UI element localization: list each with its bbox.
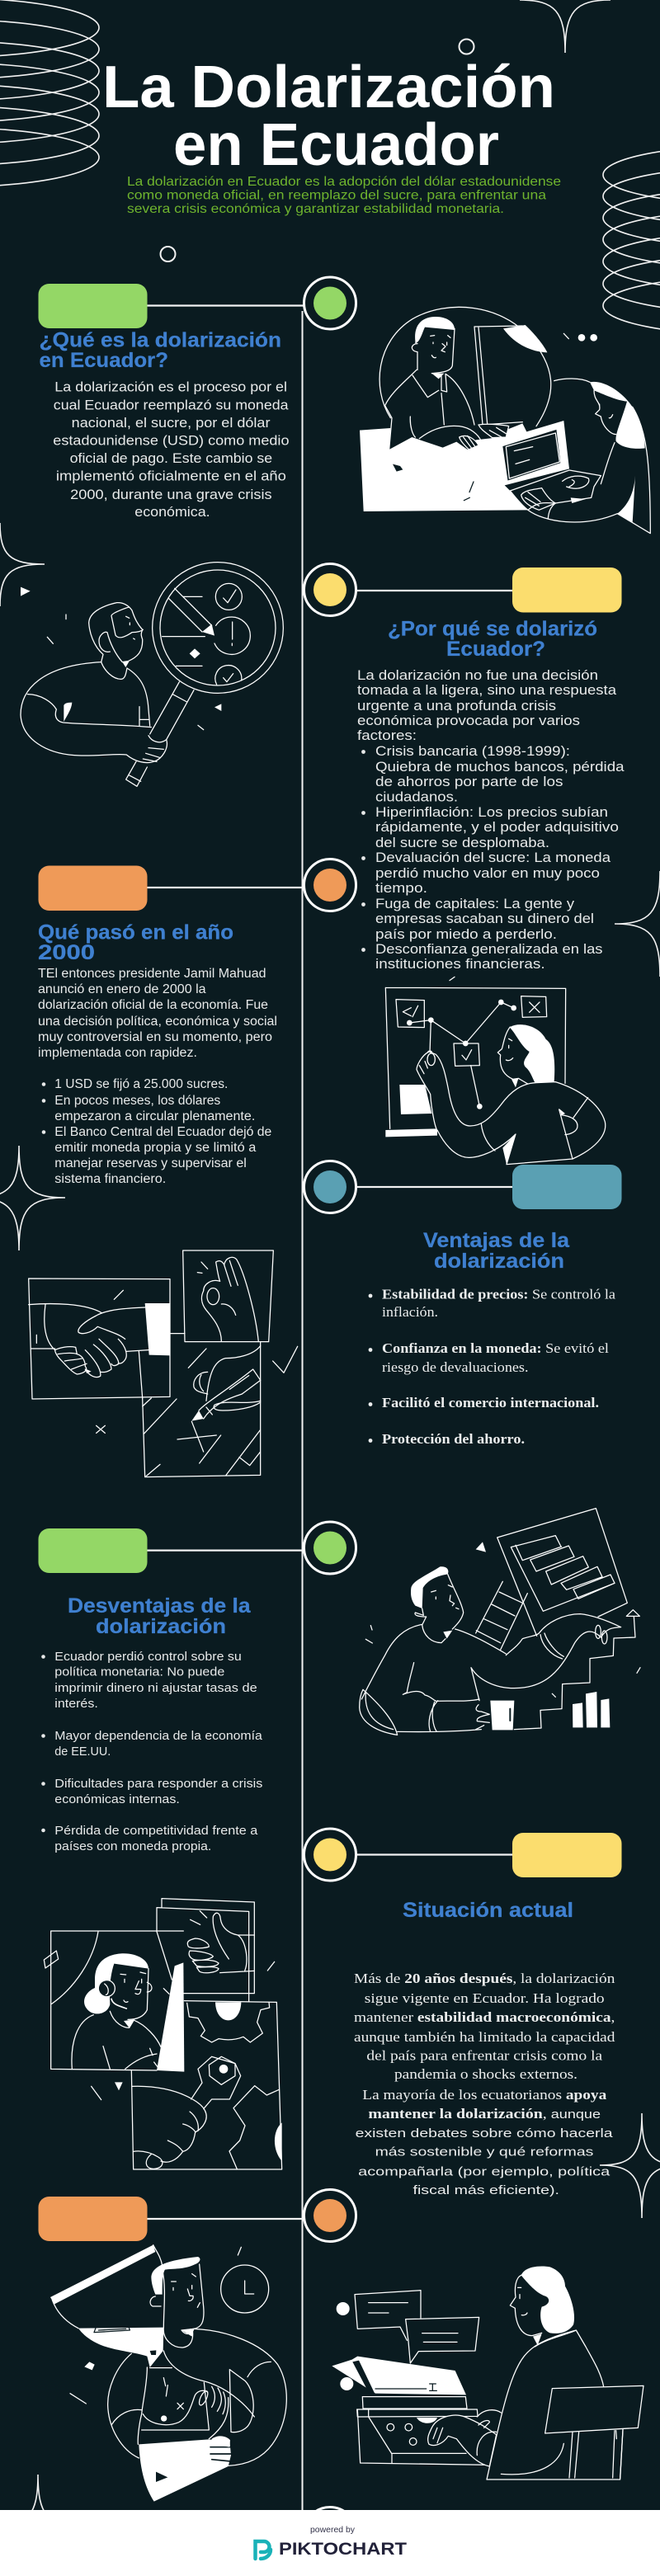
text block: situación: mantener estabilidad macroeconómica , (354, 2009, 615, 2025)
subtitle: severa crisis económica y garantizar estabilidad monetaria. (127, 202, 504, 216)
panel: ventajas (304, 1161, 640, 1735)
text block: situación: del país para enfrentar crisis como la (366, 2047, 603, 2064)
title: en Ecuador (173, 112, 499, 178)
illustration: woman at whiteboard (385, 977, 606, 1165)
connector and pill: teal (356, 1165, 622, 1209)
connector and pill: orange (38, 2197, 304, 2241)
text block: eventos: anunció en enero de 2000 la (38, 982, 206, 996)
text block: lista de desventajas: Dificultades para responder a crisis (54, 1777, 262, 1791)
text block: causas: Desconfianza generalizada en las (375, 942, 602, 957)
heading: año 2000: Qué pasó en el año (38, 921, 233, 944)
text block: eventos: dolarización oficial de la economía. Fue (38, 998, 268, 1012)
heading: qué es: ¿Qué es la dolarización (40, 328, 281, 351)
connector and pill: yellow (356, 567, 622, 612)
text block: eventos: emitir moneda propia y se limitó a (54, 1141, 257, 1155)
heading: qué es (40, 328, 281, 372)
heading: por qué (388, 617, 597, 661)
decoration: left stacked ellipses (0, 0, 99, 187)
subtitle: como moneda oficial, en reemplazo del sucre, para enfrentar una (127, 188, 546, 203)
text block: definición: nacional, el sucre, por el dólar (72, 415, 271, 431)
heading: desventajas: dolarización (96, 1615, 226, 1638)
illustration: handshake and signing frames (29, 1250, 298, 1477)
text block: causas: La dolarización no fue una decisión (357, 668, 598, 683)
panel: cierre (38, 2189, 644, 2502)
text block: definición: La dolarización es el proceso por el (54, 379, 287, 395)
text block: lista de desventajas: política monetaria: No puede (54, 1665, 224, 1679)
text block: situación: aunque también ha limitado la capacidad (354, 2029, 615, 2045)
text block: situación: La mayoría de los ecuatorianos apoya (362, 2087, 606, 2103)
text block: causas: tiempo. (375, 881, 427, 896)
decoration: right stacked ellipses (603, 145, 660, 335)
illustration: support agent, thumbs up and gears (44, 1899, 282, 2169)
heading: ventajas (423, 1229, 570, 1273)
text block: definición: implementó oficialmente en el año (56, 469, 286, 484)
text block: situación (354, 1971, 615, 2197)
node: green (304, 1522, 356, 1574)
text block: definición: cual Ecuador reemplazó su moneda (54, 397, 289, 412)
text block: eventos: En pocos meses, los dólares (54, 1094, 221, 1108)
illustration: woman at typewriter (332, 2267, 644, 2479)
subtitle (127, 175, 561, 216)
panel: desventajas (38, 1522, 356, 2169)
text block: causas (357, 668, 625, 972)
text block: definición: económica. (134, 504, 210, 520)
panel: qué es la dolarización (21, 277, 650, 786)
node: partial bottom circle (304, 2508, 356, 2559)
text block: lista de desventajas: interés. (54, 1697, 98, 1711)
text block: lista de desventajas: Mayor dependencia de la economía (54, 1729, 262, 1743)
text block: causas: del sucre se desplomaba. (375, 836, 549, 850)
text block: lista de desventajas (41, 1650, 262, 1853)
text block: eventos: implementada con rapidez. (38, 1046, 197, 1060)
text block: causas: urgente a una profunda crisis (357, 699, 556, 713)
decoration: small circles (160, 40, 474, 261)
text block: definición: oficial de pago. Este cambio se (70, 450, 272, 466)
text block: causas: rápidamente, y el poder adquisitivo (375, 820, 619, 835)
text block: lista de ventajas: Protección del ahorro. (382, 1431, 525, 1447)
footer (0, 2510, 660, 2576)
title (102, 54, 555, 178)
text block: causas: Quiebra de muchos bancos, pérdida (375, 760, 625, 775)
text block: lista de ventajas: Facilitó el comercio internacional. (382, 1395, 599, 1410)
heading: ventajas: dolarización (434, 1250, 564, 1273)
text block: eventos: manejar reservas y supervisar el (54, 1156, 247, 1170)
text block: lista de ventajas: Confianza en la moneda: Se evitó el (382, 1340, 609, 1356)
text block: situación: fiscal más eficiente). (412, 2183, 559, 2197)
text block: situación: Más de 20 años después , la dolarización (354, 1971, 615, 1986)
text block: situación: sigue vigente en Ecuador. Ha logrado (365, 1990, 605, 2006)
text block: causas: empresas sacaban su dinero del (375, 911, 594, 926)
text block: causas: económica provocada por varios (357, 713, 580, 728)
text block: definición: 2000, durante una grave crisis (70, 487, 272, 502)
timeline vertical line (302, 311, 304, 2510)
text: powered by: powered by (310, 2525, 356, 2535)
text block: situación: acompañarla (por ejemplo, política (358, 2165, 610, 2179)
text block: causas: factores: (357, 728, 417, 743)
node: teal (304, 1161, 356, 1213)
text block: lista de desventajas: países con moneda propia. (54, 1839, 211, 1853)
node: orange (304, 2189, 356, 2242)
illustration: two people at desk with laptop (360, 307, 650, 534)
icon: piktochart logo (256, 2541, 271, 2559)
subtitle: La dolarización en Ecuador es la adopción del dólar estadounidense (127, 175, 561, 189)
text block: situación: existen debates sobre cómo hacerla (356, 2126, 613, 2140)
text block: lista de desventajas: Ecuador perdió control sobre su (54, 1650, 242, 1664)
text block: causas: Crisis bancaria (1998-1999): (375, 744, 570, 759)
text block: eventos (38, 967, 277, 1186)
text block: causas: Devaluación del sucre: La moneda (375, 850, 611, 865)
text block: lista de ventajas (369, 1287, 615, 1447)
text block: lista de ventajas: Estabilidad de precios: Se controló la (382, 1287, 615, 1302)
text block: lista de desventajas: Pérdida de competitividad frente a (54, 1824, 258, 1838)
node: yellow (304, 564, 356, 615)
node: yellow (304, 1829, 356, 1881)
text block: eventos: 1 USD se fijó a 25.000 sucres. (54, 1077, 228, 1091)
text block: lista de desventajas: de EE.UU. (54, 1745, 111, 1759)
text block: situación: pandemia o shocks externos. (394, 2066, 578, 2082)
connector and pill: yellow (356, 1833, 622, 1877)
heading: por qué: Ecuador? (446, 638, 545, 661)
text block: eventos: TEl entonces presidente Jamil Mahuad (38, 967, 266, 981)
panel: situación actual (304, 1829, 622, 2197)
node: green (304, 277, 356, 329)
text block: causas: de ahorros por parte de los (375, 775, 563, 789)
text block: lista de desventajas: económicas internas. (54, 1792, 180, 1806)
text block: eventos: empezaron a circular plenamente. (54, 1109, 255, 1123)
text block: causas: tomada a la ligera, sino una respuesta (357, 683, 617, 698)
text: piktochart: PIKTOCHART (279, 2540, 407, 2559)
text block: definición (53, 379, 290, 520)
text block: situación: más sostenible y qué reformas (375, 2145, 593, 2159)
heading: desventajas (68, 1594, 252, 1638)
text block: situación: mantener la dolarización , aunque (368, 2106, 601, 2122)
text block: causas: instituciones financieras. (375, 957, 545, 972)
panel: por qué se dolarizó (304, 564, 625, 1165)
text block: lista de desventajas: imprimir dinero ni ajustar tasas de (54, 1681, 257, 1695)
illustration: man with hourglass and tablet (50, 2245, 286, 2502)
heading: año 2000: 2000 (38, 941, 95, 964)
heading: por qué: ¿Por qué se dolarizó (388, 617, 597, 640)
heading: situación actual: Situación actual (403, 1899, 573, 1922)
connector and pill: green (38, 284, 304, 328)
connector and pill: green (38, 1528, 304, 1573)
text block: definición: estadounidense (USD) como medio (53, 433, 290, 449)
heading: año 2000 (38, 921, 233, 964)
node: orange (304, 859, 356, 911)
text block: causas: Fuga de capitales: La gente y (375, 897, 575, 911)
text block: eventos: muy controversial en su momento, pero (38, 1030, 272, 1044)
panel: qué pasó en el año 2000 (29, 859, 356, 1477)
heading: ventajas: Ventajas de la (423, 1229, 570, 1252)
connector and pill: orange (38, 866, 304, 911)
heading: qué es: en Ecuador? (40, 349, 168, 372)
text block: causas: ciudadanos. (375, 790, 458, 805)
text block: causas: Hiperinflación: Los precios subían (375, 805, 608, 820)
text block: eventos: El Banco Central del Ecuador dejó de (54, 1125, 271, 1139)
text block: lista de ventajas: inflación. (382, 1304, 438, 1320)
text block: lista de ventajas: riesgo de devaluaciones. (382, 1359, 528, 1375)
text block: causas: país por miedo a perderlo. (375, 927, 557, 942)
illustration: man with magnifying glass (21, 563, 283, 786)
illustration: man with chart and staircase (360, 1509, 640, 1735)
text block: eventos: sistema financiero. (54, 1172, 166, 1186)
text block: causas: perdió mucho valor en muy poco (375, 866, 600, 881)
heading: desventajas: Desventajas de la (68, 1594, 252, 1618)
title: La Dolarización (102, 54, 555, 120)
text block: eventos: una decisión política, económica y social (38, 1015, 277, 1029)
